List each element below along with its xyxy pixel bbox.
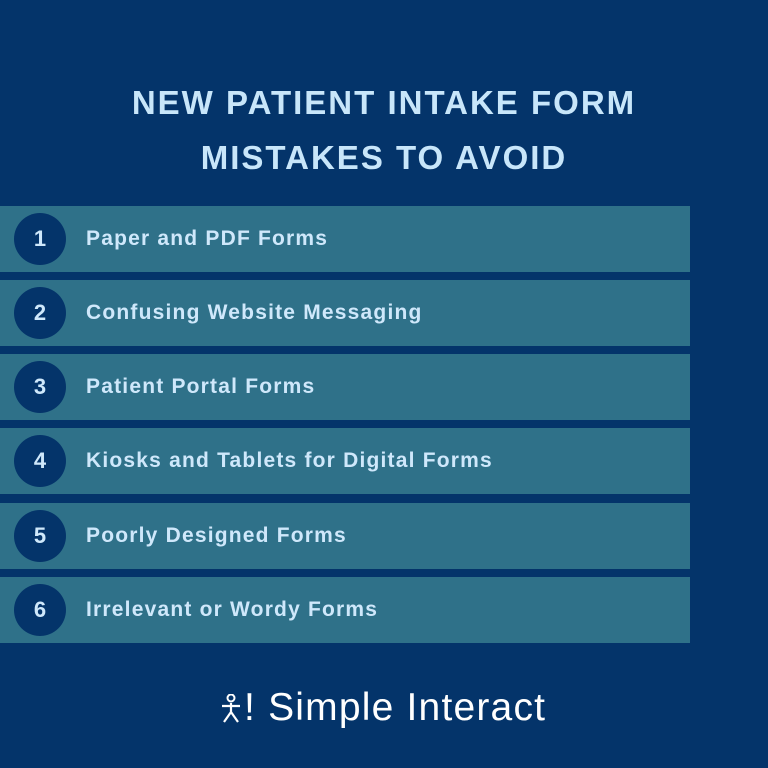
row 1 (0, 206, 690, 272)
row 6: 6 (34, 597, 46, 622)
row 6: Irrelevant or Wordy Forms (86, 598, 378, 621)
row 2: 2 (34, 300, 46, 325)
row 1: Paper and PDF Forms (86, 227, 328, 250)
row 4: Kiosks and Tablets for Digital Forms (86, 449, 493, 472)
row 3: Patient Portal Forms (86, 375, 315, 398)
title (132, 84, 636, 176)
row 5: Poorly Designed Forms (86, 524, 347, 547)
icon: person (222, 694, 240, 723)
row 2: Confusing Website Messaging (86, 301, 423, 324)
row 3 (0, 354, 690, 420)
logo: ! Simple Interact (244, 686, 546, 729)
row 5 (0, 503, 690, 569)
row 5: 5 (34, 523, 46, 548)
row 1: 1 (34, 226, 46, 251)
row 6 (0, 577, 690, 643)
row 3: 3 (34, 374, 46, 399)
title: MISTAKES TO AVOID (201, 139, 567, 176)
title: NEW PATIENT INTAKE FORM (132, 84, 636, 121)
row 2 (0, 280, 690, 346)
row 4: 4 (34, 448, 46, 473)
row 4 (0, 428, 690, 494)
